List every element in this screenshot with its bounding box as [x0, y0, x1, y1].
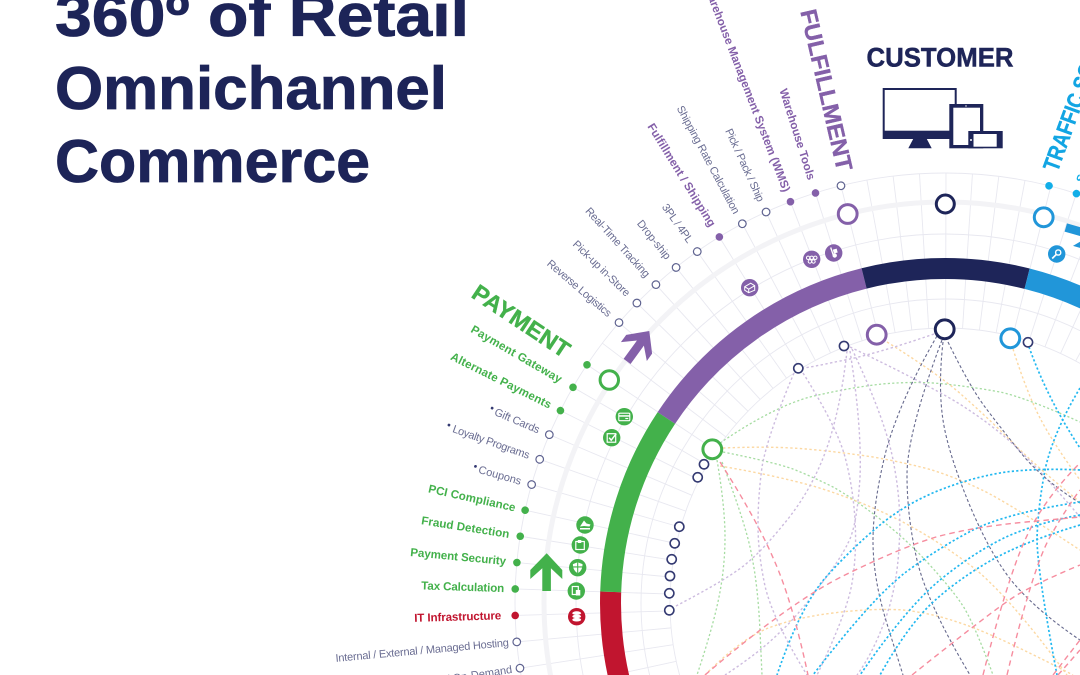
icon: warehouse management people: [803, 251, 820, 268]
label: Reverse Logistics: Reverse Logistics: [544, 258, 614, 320]
label: Tax Calculation: Tax Calculation: [421, 579, 504, 595]
label: Drop-ship: Drop-ship: [634, 218, 673, 262]
icon: fraud detection: [572, 536, 589, 554]
icon: fulfillment box: [741, 279, 758, 296]
traffic sources dots and label: [1044, 103, 1080, 199]
label: Pick / Pack / Ship: Pick / Pack / Ship: [722, 127, 766, 204]
label: Real-Time Tracking: Real-Time Tracking: [583, 205, 652, 280]
labels and dots: payment: [410, 279, 597, 596]
arrow: payment green: [530, 553, 562, 591]
segmented category ring: [611, 268, 1080, 675]
outer category rings: [600, 195, 1053, 389]
label: Payment Gateway: Payment Gateway: [469, 323, 565, 386]
label: Coupons: [472, 463, 537, 492]
title: Omnichannel: [55, 55, 447, 122]
label: Drop-ship: [634, 218, 683, 274]
label: PCI Compliance: PCI Compliance: [427, 483, 517, 515]
icon: warehouse tools cart: [825, 244, 842, 262]
PAYMENT heading: [467, 279, 597, 378]
label: Shipping Rate Calculation: Shipping Rate Calculation: [674, 104, 742, 216]
label: 3PL / 4PL: 3PL / 4PL: [659, 202, 695, 245]
icon: pci compliance: [576, 516, 594, 534]
title: [55, 0, 469, 195]
label: Fraud Detection: Fraud Detection: [420, 514, 510, 541]
icon: database: [568, 608, 585, 625]
PAYMENT heading: PAYMENT: [467, 279, 575, 363]
connection lines chord diagram: [674, 334, 1080, 675]
arrow: traffic sources blue: [1061, 212, 1080, 253]
label: Internal / External / Managed Hosting: Internal / External / Managed Hosting: [335, 637, 509, 665]
label: Gift Cards: [488, 404, 555, 442]
radial chart grid: [515, 173, 1080, 675]
label: Fulfillment / Shipping: Fulfillment / Shipping: [645, 121, 718, 229]
FULFILLMENT heading: FULFILLMENT: [795, 7, 858, 173]
label: Alternate Payments: Alternate Payments: [448, 350, 554, 411]
icon: traffic key: [1048, 245, 1065, 263]
label: Loyalty Programs: [445, 421, 545, 467]
title: Commerce: [55, 128, 370, 195]
label: Gift Cards: Gift Cards: [492, 406, 542, 437]
icon: payment gateway card: [616, 408, 633, 425]
label: IT Infrastructure: IT Infrastructure: [414, 609, 502, 625]
labels and dots: it infrastructure: [335, 609, 525, 675]
label: 3PL / 4PL: [659, 202, 704, 258]
labels and dots: fulfillment: [544, 0, 865, 330]
icon: alternate payments check: [603, 429, 620, 446]
customer heading: CUSTOMER: [866, 43, 1014, 73]
icon: customer devices: [883, 89, 1003, 148]
label: Warehouse Tools: Warehouse Tools: [776, 87, 817, 182]
label: Coupons: Coupons: [477, 464, 523, 488]
label: Loyalty Programs: Loyalty Programs: [451, 423, 532, 462]
label: Pick-up in-Store: Pick-up in-Store: [570, 238, 632, 299]
icon: tax calculation: [568, 582, 585, 600]
inner chord nodes: [665, 320, 1033, 615]
label: Payment Security: Payment Security: [410, 546, 507, 568]
arrow: fulfillment purple: [614, 321, 662, 371]
icon: shield: [569, 559, 586, 576]
